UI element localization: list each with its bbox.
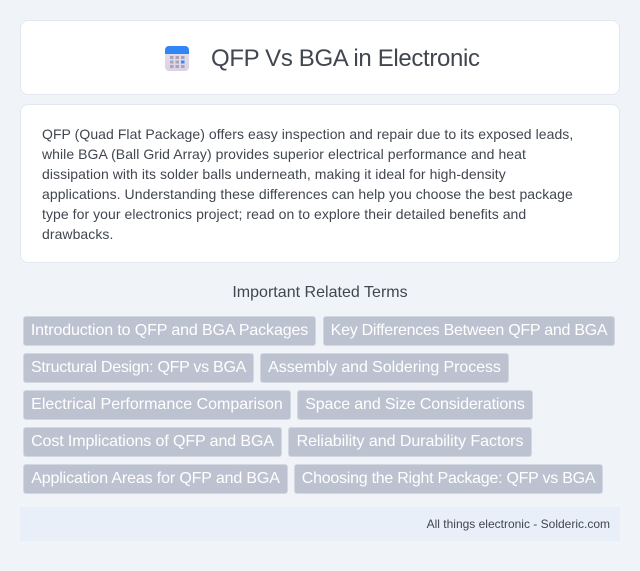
icon: calendar: [165, 46, 189, 71]
text block: description: dissipation with its solder balls underneath, making it ideal for high-density: [42, 166, 506, 182]
text block: description: applications. Understanding these differences can help you choose the best package: [42, 186, 573, 202]
heading: related terms: Important Related Terms: [232, 284, 408, 301]
panel: term tags: Application Areas for QFP and BGA: [31, 470, 280, 487]
text block: description: type for your electronics project; read on to explore their detailed benefits and: [42, 206, 526, 222]
panel: term tags: Assembly and Soldering Process: [268, 359, 501, 376]
footer: [20, 507, 620, 541]
panel: term tags: Choosing the Right Package: QFP vs BGA: [302, 470, 595, 487]
panel: term tags: Space and Size Considerations: [305, 396, 525, 413]
panel: term tags: Reliability and Durability Factors: [297, 433, 523, 450]
panel: description: [20, 104, 620, 263]
title: QFP Vs BGA in Electronic: [211, 45, 480, 72]
text block: description: [42, 126, 573, 242]
panel: header: [20, 20, 620, 95]
panel: term tags: Cost Implications of QFP and BGA: [31, 433, 274, 450]
text block: description: drawbacks.: [42, 226, 113, 242]
panel: term tags: Structural Design: QFP vs BGA: [31, 359, 246, 376]
text block: description: while BGA (Ball Grid Array) provides superior electrical performance and heat: [42, 146, 526, 162]
panel: term tags: [23, 316, 615, 494]
text block: description: QFP (Quad Flat Package) offers easy inspection and repair due to its exposed leads,: [42, 126, 573, 142]
footer: All things electronic - Solderic.com: [427, 517, 610, 531]
panel: term tags: Introduction to QFP and BGA Packages: [31, 322, 308, 339]
panel: term tags: Key Differences Between QFP and BGA: [331, 322, 607, 339]
panel: term tags: Electrical Performance Comparison: [31, 396, 283, 413]
